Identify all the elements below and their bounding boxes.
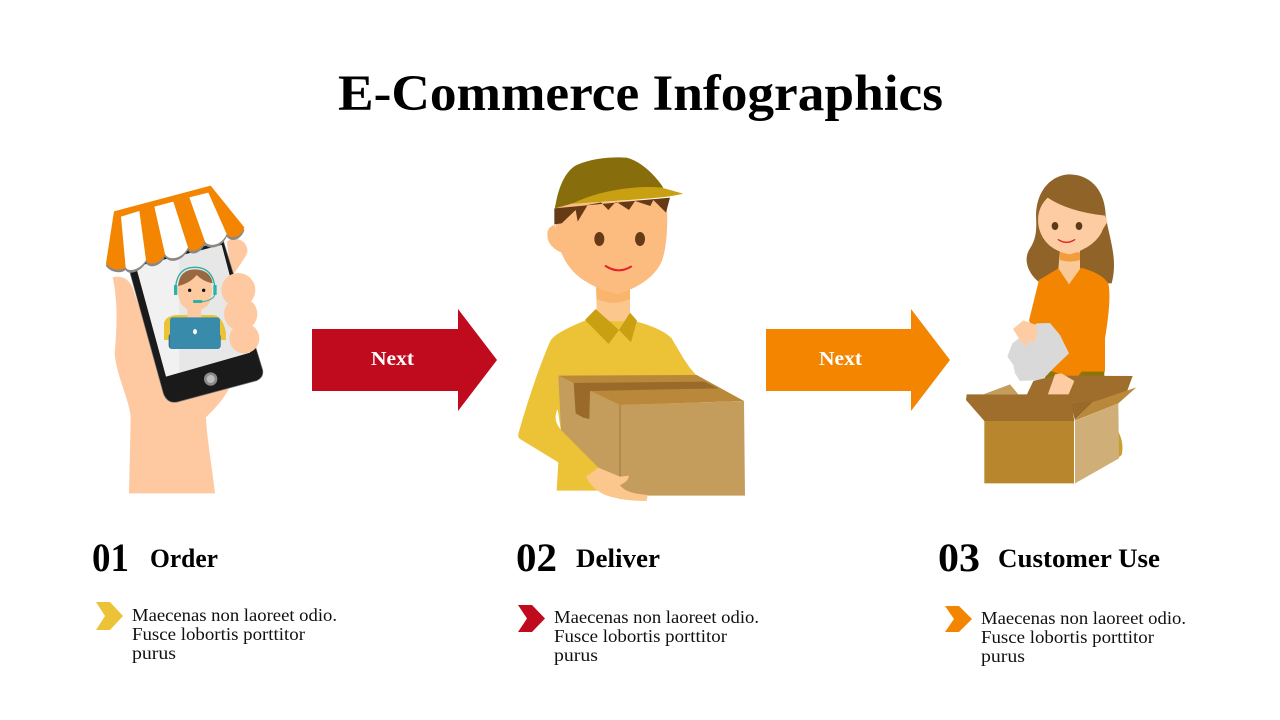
hand on paper — [1013, 320, 1037, 347]
description: Maecenas non laoreet odio. — [554, 607, 759, 627]
step 03: customer use — [938, 535, 1186, 666]
heading: Customer Use — [998, 544, 1160, 573]
ear — [547, 225, 563, 253]
shirt — [518, 321, 698, 491]
crumpled paper — [1007, 323, 1069, 381]
neck — [596, 285, 630, 332]
description: purus — [132, 643, 176, 663]
chevron — [945, 606, 972, 632]
face — [1038, 198, 1108, 254]
illustration: delivery man carrying box — [518, 157, 745, 501]
hand in box — [1048, 373, 1074, 395]
home button — [204, 372, 217, 386]
sweater — [1029, 268, 1109, 381]
step 02: deliver — [516, 535, 759, 665]
front fingers — [221, 273, 259, 353]
shop awning — [106, 186, 244, 273]
hand and wrist — [113, 277, 230, 493]
phone body — [128, 241, 263, 402]
cap — [555, 157, 663, 208]
number: 02 — [516, 535, 557, 580]
parcel box — [556, 375, 745, 496]
arrow label: Next — [819, 348, 862, 370]
title: E-Commerce Infographics — [338, 66, 943, 122]
neck — [1058, 250, 1080, 284]
illustration: hand holding phone with shop awning — [106, 186, 263, 493]
cardboard box — [966, 373, 1136, 483]
eyes and smile — [1052, 222, 1082, 242]
arrow: deliver to customer — [766, 309, 950, 411]
skirt and back of box leg — [1045, 371, 1104, 382]
illustration: customer unpacking box — [966, 174, 1136, 483]
description: purus — [554, 645, 598, 665]
support agent — [164, 267, 226, 349]
description: Maecenas non laoreet odio. — [132, 605, 337, 625]
step 01: order — [92, 535, 337, 663]
chevron — [96, 602, 123, 630]
number: 01 — [92, 535, 129, 580]
description: Fusce lobortis porttitor — [981, 627, 1154, 647]
hair — [554, 198, 670, 224]
face — [555, 198, 667, 294]
heading: Order — [150, 544, 218, 573]
back fingertip — [227, 239, 247, 277]
eyes and smile — [594, 232, 645, 270]
description: Fusce lobortis porttitor — [554, 626, 727, 646]
arrow label: Next — [371, 348, 414, 370]
number: 03 — [938, 535, 980, 580]
description: Fusce lobortis porttitor — [132, 624, 305, 644]
description: Maecenas non laoreet odio. — [981, 608, 1186, 628]
hair back — [1027, 174, 1114, 283]
arrow: order to deliver — [312, 309, 497, 411]
description: purus — [981, 646, 1025, 666]
heading: Deliver — [576, 544, 660, 573]
chevron — [518, 605, 545, 632]
phone screen — [136, 245, 250, 377]
collar — [585, 309, 637, 344]
hand under box — [586, 468, 648, 501]
